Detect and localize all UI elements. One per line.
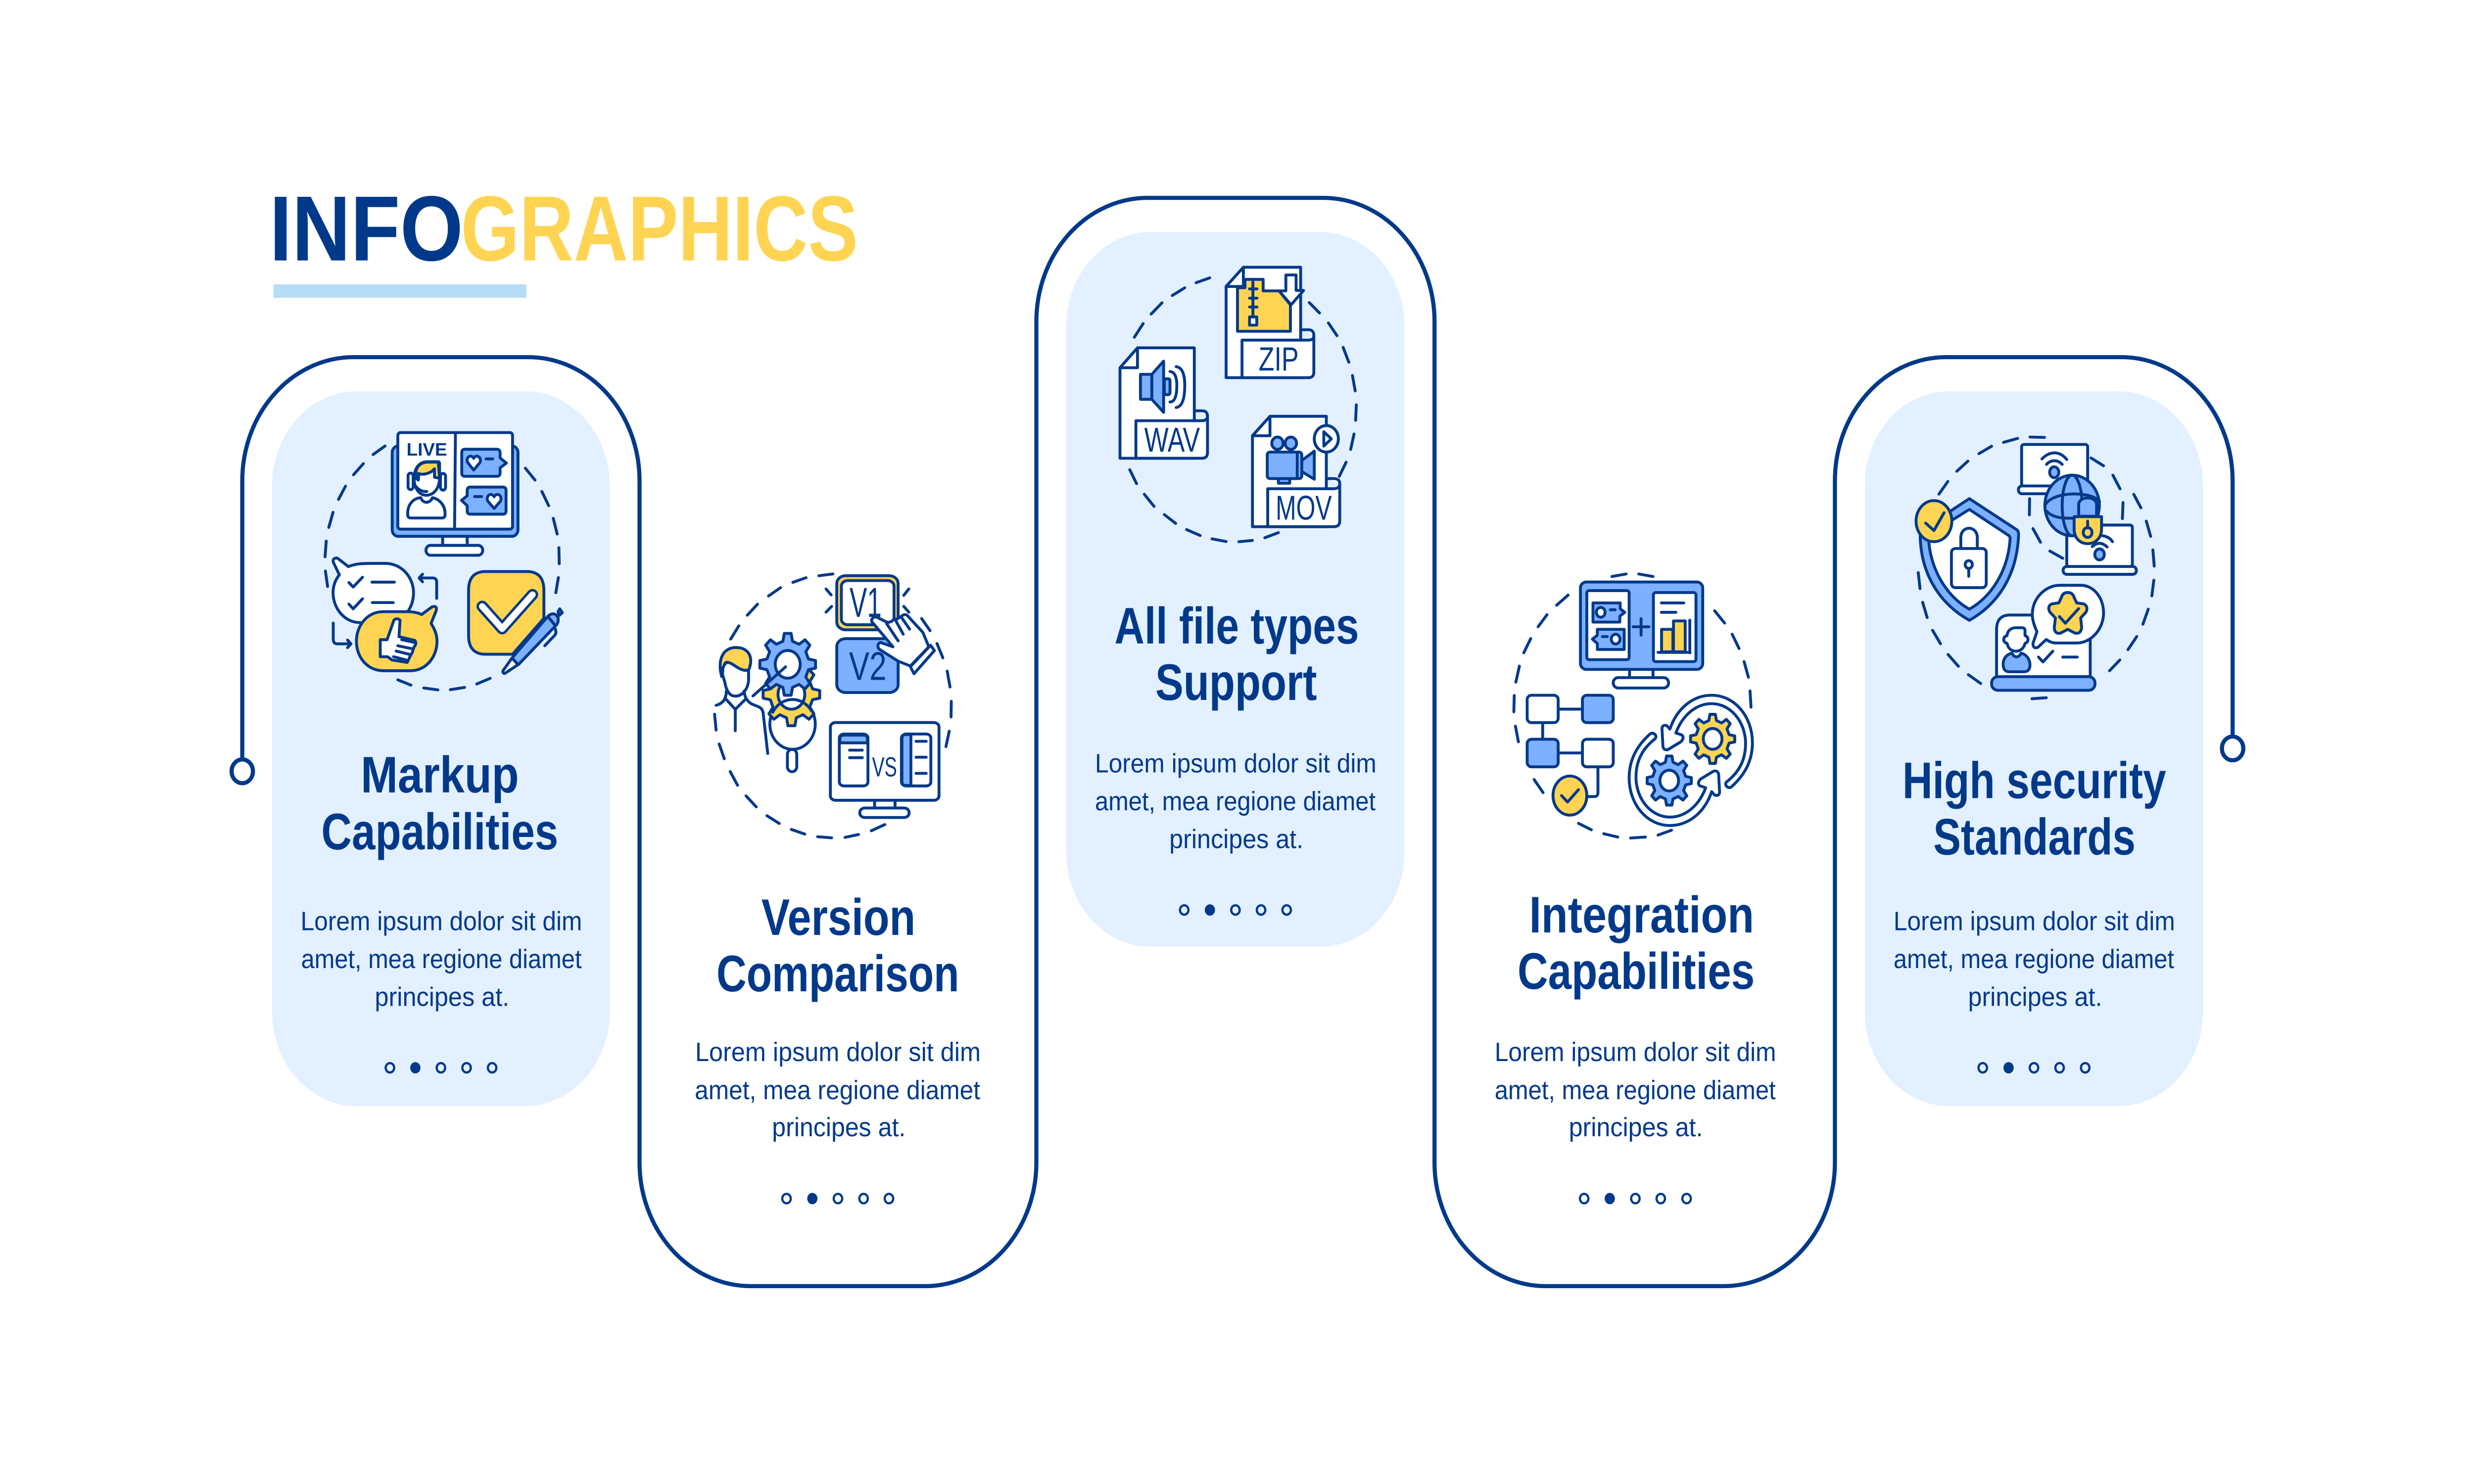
heading (1903, 751, 2166, 866)
body text: Lorem ipsum dolor sit dim (1495, 1037, 1776, 1067)
icon: version comparison: V1 (850, 579, 882, 626)
heading (321, 745, 558, 860)
body text: principes at. (772, 1112, 905, 1142)
body text: amet, mea regione diamet (301, 944, 582, 974)
heading: Support (1155, 653, 1317, 711)
heading (716, 888, 959, 1002)
heading: Capabilities (321, 802, 558, 860)
heading (1518, 885, 1755, 1000)
heading: High security (1903, 751, 2166, 809)
body text (1894, 906, 2175, 1012)
title underline (274, 284, 526, 298)
heading (1114, 597, 1359, 711)
body text (1495, 1037, 1776, 1142)
panel background (272, 391, 610, 1106)
panel: All file types Support (1066, 232, 1404, 947)
icon: file types (1120, 267, 1356, 542)
body text: Lorem ipsum dolor sit dim (301, 906, 582, 936)
heading: Capabilities (1518, 942, 1755, 1000)
icon: file types: MOV (1276, 489, 1332, 527)
icon: version comparison (714, 574, 952, 838)
title: INFOGRAPHICS: INFO (270, 177, 463, 280)
body text: amet, mea regione diamet (1894, 944, 2174, 974)
heading: All file types (1114, 597, 1359, 654)
title: INFOGRAPHICS: GRAPHICS (461, 177, 858, 280)
icon: live stream markup (325, 432, 562, 690)
heading: Version (761, 888, 915, 946)
panel background (1066, 232, 1404, 947)
body text (695, 1037, 981, 1142)
body text (1095, 748, 1377, 854)
icon: version comparison: V2 (849, 644, 887, 689)
body text: amet, mea regione diamet (1495, 1075, 1776, 1105)
panel: Markup Capabilities (272, 391, 610, 1106)
pagination dots (1580, 1193, 1691, 1204)
panel: Version Comparison (695, 574, 981, 1204)
heading: Standards (1933, 808, 2136, 866)
body text: Lorem ipsum dolor sit dim (1894, 906, 2175, 936)
title: INFOGRAPHICS (270, 177, 858, 280)
icon: file types: WAV (1144, 421, 1200, 460)
body text: principes at. (1169, 824, 1303, 854)
panel background (1865, 391, 2203, 1106)
pagination dots (1180, 904, 1291, 916)
connecting outline with end circles (232, 198, 2243, 1286)
panel: High security Standards (1865, 391, 2203, 1106)
pagination dots (1979, 1062, 2090, 1073)
heading: Markup (361, 745, 519, 803)
body text: principes at. (1569, 1112, 1703, 1142)
body text: principes at. (1968, 981, 2102, 1012)
pagination dots (385, 1062, 496, 1073)
body text: principes at. (375, 981, 509, 1012)
pagination dots (782, 1193, 893, 1204)
body text: amet, mea regione diamet (695, 1075, 980, 1105)
icon: security (1916, 437, 2154, 699)
body text: Lorem ipsum dolor sit dim (695, 1037, 981, 1067)
body text: amet, mea regione diamet (1095, 786, 1376, 816)
icon: live stream markup: LIVE (407, 440, 447, 460)
icon: file types: ZIP (1259, 340, 1299, 378)
body text: Lorem ipsum dolor sit dim (1095, 748, 1377, 778)
icon: integration (1514, 574, 1753, 838)
heading: Integration (1529, 885, 1754, 943)
panel: Integration Capabilities (1495, 574, 1776, 1204)
heading: Comparison (716, 944, 959, 1002)
body text (301, 906, 582, 1012)
icon: version comparison: VS (872, 752, 897, 783)
